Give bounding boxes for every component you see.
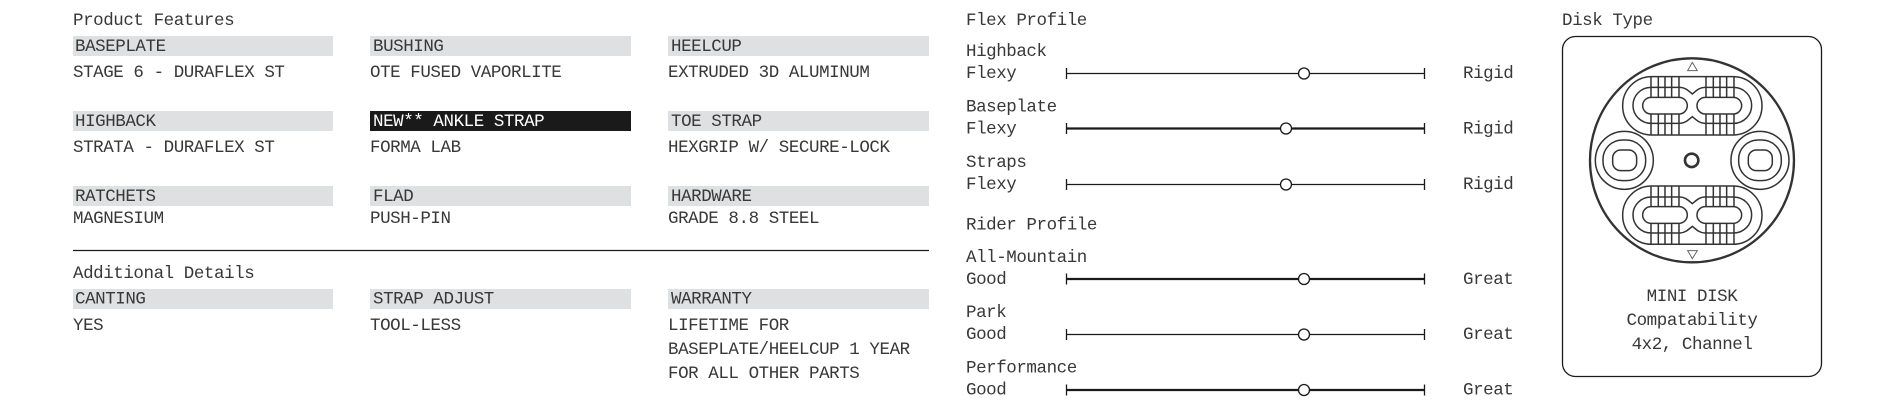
slider: park: Great xyxy=(1463,325,1513,345)
feature: toe strap xyxy=(668,111,929,158)
top channel slots xyxy=(1623,77,1762,135)
feature: bushing: BUSHING xyxy=(373,37,444,57)
slider: all-mountain xyxy=(966,248,1513,290)
right bolt pad xyxy=(1731,131,1789,189)
slider: park: Park xyxy=(966,303,1006,323)
slider: highback flex: Rigid xyxy=(1463,64,1513,84)
feature: highback xyxy=(73,111,333,158)
slider: all-mountain: Good xyxy=(966,270,1006,290)
detail: canting: YES xyxy=(73,316,103,336)
slider: highback flex xyxy=(966,42,1513,84)
feature: baseplate: BASEPLATE xyxy=(75,37,166,57)
detail: canting: CANTING xyxy=(75,290,146,310)
slider: baseplate flex: Baseplate xyxy=(966,98,1057,118)
feature: ratchets xyxy=(73,186,333,229)
disk caption: Compatability xyxy=(1627,311,1757,331)
panel: product features xyxy=(73,11,929,229)
panel: disk type xyxy=(1562,11,1822,376)
feature: toe strap: TOE STRAP xyxy=(671,112,762,132)
slider: baseplate flex: Rigid xyxy=(1463,120,1513,140)
feature: ratchets: MAGNESIUM xyxy=(73,209,164,229)
slider: baseplate flex xyxy=(966,98,1513,140)
feature: hardware: GRADE 8.8 STEEL xyxy=(668,209,819,229)
panel: rider profile xyxy=(966,216,1513,400)
slider: baseplate flex: Flexy xyxy=(966,120,1016,140)
slider: highback flex: Flexy xyxy=(966,64,1016,84)
feature: toe strap: HEXGRIP W/ SECURE-LOCK xyxy=(668,138,891,158)
feature: bushing xyxy=(370,36,631,83)
detail: strap adjust: STRAP ADJUST xyxy=(373,290,494,310)
slider: all-mountain: Great xyxy=(1463,270,1513,290)
feature: heelcup: EXTRUDED 3D ALUMINUM xyxy=(668,63,869,83)
disk caption: 4x2, Channel xyxy=(1632,335,1752,355)
bottom channel slots xyxy=(1623,186,1762,244)
feature: bushing: OTE FUSED VAPORLITE xyxy=(370,63,561,83)
icon: bottom arrow xyxy=(1688,251,1697,259)
disk caption: MINI DISK xyxy=(1647,287,1738,307)
feature: heelcup: HEELCUP xyxy=(671,37,742,57)
feature: highback: HIGHBACK xyxy=(75,112,157,132)
slider: straps flex: Straps xyxy=(966,153,1026,173)
feature: flad xyxy=(370,186,631,229)
slider: straps flex: Flexy xyxy=(966,175,1016,195)
detail: warranty xyxy=(668,289,929,384)
feature: flad: PUSH-PIN xyxy=(370,209,451,229)
feature: heelcup xyxy=(668,36,929,83)
heading: additional details: Additional Details xyxy=(73,264,254,284)
slider: highback flex: Highback xyxy=(966,42,1047,62)
slider: performance xyxy=(966,358,1513,400)
feature: new ankle strap, highlighted xyxy=(370,111,631,158)
detail: strap adjust xyxy=(370,289,631,336)
panel: additional details xyxy=(73,264,929,384)
detail: warranty: LIFETIME FOR xyxy=(668,316,790,336)
detail: canting xyxy=(73,289,333,336)
heading: rider profile: Rider Profile xyxy=(966,216,1097,236)
feature: flad: FLAD xyxy=(373,187,413,207)
feature: highback: STRATA - DURAFLEX ST xyxy=(73,138,274,158)
detail: warranty: WARRANTY xyxy=(671,290,753,310)
slider: park: Good xyxy=(966,325,1006,345)
panel: flex profile xyxy=(966,11,1513,195)
slider: straps flex xyxy=(966,153,1513,195)
heading: product features: Product Features xyxy=(73,11,234,31)
slider: performance: Great xyxy=(1463,380,1513,400)
detail: warranty: FOR ALL OTHER PARTS xyxy=(668,364,859,384)
slider: all-mountain: All-Mountain xyxy=(966,248,1087,268)
slider: straps flex: Rigid xyxy=(1463,175,1513,195)
center screw ring xyxy=(1685,154,1698,167)
feature: hardware xyxy=(668,186,929,229)
slider: performance: Performance xyxy=(966,358,1077,378)
disk caption xyxy=(1627,287,1757,355)
slider: park xyxy=(966,303,1513,345)
feature: hardware: HARDWARE xyxy=(671,187,752,207)
icon: mini disk diagram xyxy=(1590,58,1794,262)
slider: performance: Good xyxy=(966,380,1006,400)
icon: top arrow xyxy=(1688,62,1697,71)
feature: baseplate: STAGE 6 - DURAFLEX ST xyxy=(73,63,285,83)
disk card outline xyxy=(1562,36,1822,376)
feature: new ankle strap, highlighted: NEW** ANKLE STRAP xyxy=(373,112,544,132)
feature: new ankle strap, highlighted: FORMA LAB xyxy=(370,138,461,158)
detail: warranty: BASEPLATE/HEELCUP 1 YEAR xyxy=(668,340,911,360)
heading: disk type: Disk Type xyxy=(1562,11,1653,31)
heading: flex profile: Flex Profile xyxy=(966,11,1087,31)
left bolt pad xyxy=(1595,131,1653,189)
detail: strap adjust: TOOL-LESS xyxy=(370,316,461,336)
feature: ratchets: RATCHETS xyxy=(75,187,156,207)
feature: baseplate xyxy=(73,36,333,83)
